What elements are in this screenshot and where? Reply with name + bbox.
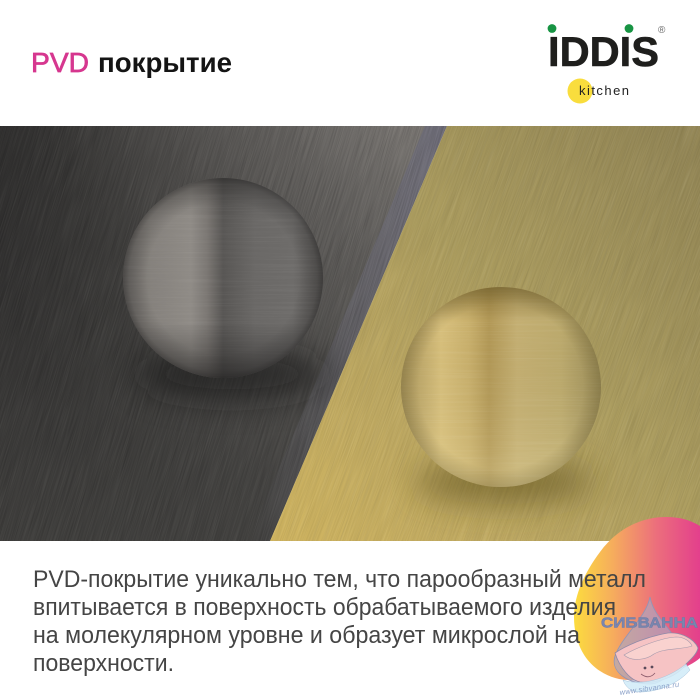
gray sphere [123,178,323,378]
watermark water [623,664,690,692]
logo green dots [548,24,633,33]
watermark: sibvanna [601,597,698,697]
watermark name: СИБВАННА [601,614,698,632]
watermark face [641,666,655,677]
description text: на молекулярном уровне и образует микрослой на [33,623,581,649]
dark gunmetal plate [0,126,447,541]
logo: iddis kitchen [548,24,666,104]
watermark url: www.sibvanna.ru [619,680,681,697]
kitchen label: kitchen [579,83,629,98]
description text: PVD-покрытие уникально тем, что парообразный металл [33,567,646,593]
watermark drop [614,597,677,684]
watermark bath rim [624,637,692,659]
gradient blob [574,517,700,680]
description text: впитывается в поверхность обрабатываемого изделия [33,595,616,621]
description text: поверхности. [33,651,174,677]
title: покрытие [98,47,232,78]
gold sphere [401,287,601,487]
registered mark: ® [658,25,666,36]
description text [33,567,646,677]
photo: metal plates with spheres [0,126,700,541]
watermark bath [615,633,698,682]
title: PVD [31,47,89,78]
gold plate [270,126,700,541]
yellow spot [568,78,592,104]
title [31,47,232,78]
logo wordmark: IDDIS [548,28,659,75]
